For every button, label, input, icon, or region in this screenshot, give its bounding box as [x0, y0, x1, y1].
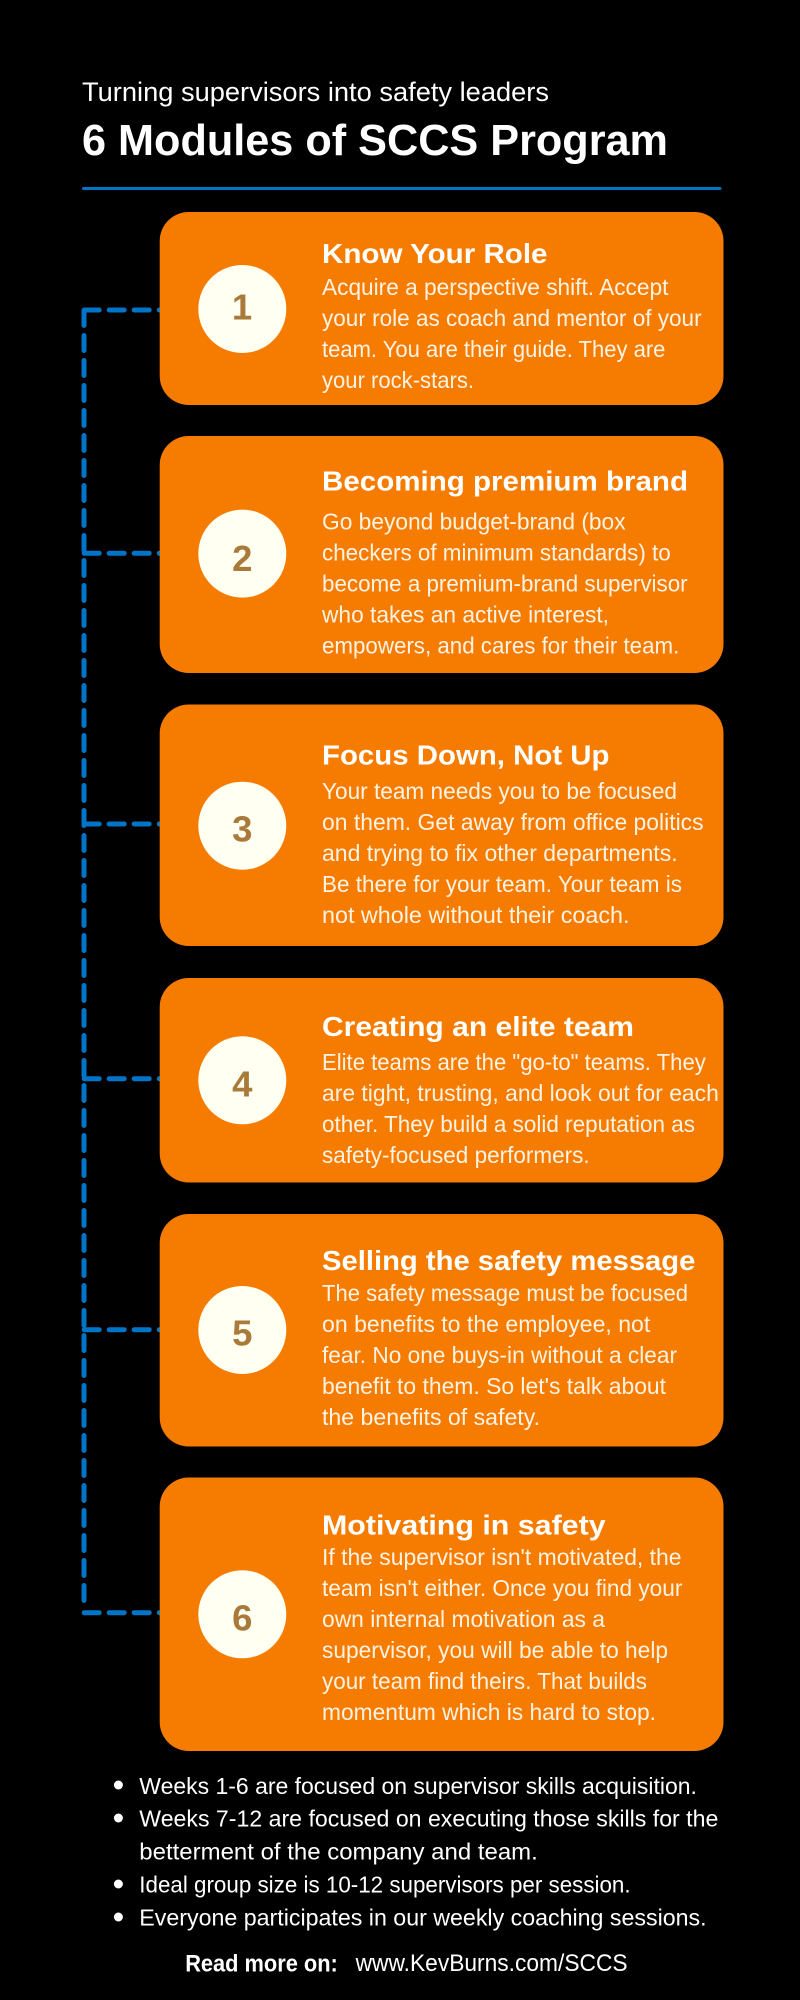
- number badge 2: [198, 510, 286, 598]
- body text: and trying to fix other departments.: [322, 840, 678, 866]
- number badge 5: [198, 1286, 286, 1374]
- body text: your role as coach and mentor of your: [322, 305, 702, 331]
- dashed connector lines: [84, 310, 160, 1613]
- body text: Elite teams are the "go-to" teams. They: [322, 1049, 706, 1075]
- card background: [160, 212, 723, 405]
- body text: supervisor, you will be able to help: [322, 1637, 668, 1663]
- body text: not whole without their coach.: [322, 902, 630, 928]
- body text: [322, 1280, 688, 1430]
- body text: own internal motivation as a: [322, 1606, 605, 1632]
- read more label: Read more on:: [185, 1950, 338, 1978]
- title rule: [82, 187, 722, 190]
- body text: team. You are their guide. They are: [322, 336, 665, 362]
- header: [82, 77, 722, 190]
- body text: empowers, and cares for their team.: [322, 632, 679, 658]
- body text: momentum which is hard to stop.: [322, 1699, 656, 1725]
- body text: [322, 1544, 683, 1725]
- body text: [322, 1049, 719, 1168]
- body text: [322, 274, 702, 393]
- number badge 4: [198, 1036, 286, 1124]
- body text: other. They build a solid reputation as: [322, 1111, 695, 1137]
- card background: [160, 1478, 723, 1751]
- number badge 6: [198, 1570, 286, 1658]
- body text: your rock-stars.: [322, 367, 474, 393]
- subtitle: Turning supervisors into safety leaders: [82, 77, 549, 107]
- number badge 2: 2: [232, 538, 252, 579]
- bullet list: Weeks 7-12 are focused on executing those skills for the: [139, 1806, 718, 1832]
- body text: [321, 508, 688, 658]
- title: 6 Modules of SCCS Program: [82, 116, 668, 165]
- bullet list: Everyone participates in our weekly coaching sessions.: [139, 1905, 707, 1931]
- heading: Motivating in safety: [322, 1510, 606, 1541]
- heading: Creating an elite team: [322, 1011, 634, 1042]
- body text: on benefits to the employee, not: [322, 1311, 651, 1337]
- body text: the benefits of safety.: [322, 1404, 540, 1430]
- heading: Becoming premium brand: [322, 466, 688, 496]
- panel: module 4: [160, 978, 723, 1182]
- number badge 5: 5: [232, 1313, 252, 1354]
- bullet list: betterment of the company and team.: [139, 1838, 538, 1864]
- number badge 1: 1: [232, 286, 252, 327]
- bullet list: Ideal group size is 10-12 supervisors per session.: [139, 1872, 631, 1898]
- body text: on them. Get away from office politics: [322, 809, 704, 835]
- number badge 4: 4: [232, 1064, 253, 1104]
- panel: module 3: [160, 704, 723, 946]
- card background: [160, 704, 723, 946]
- heading: Know Your Role: [322, 238, 548, 269]
- body text: become a premium-brand supervisor: [322, 570, 688, 596]
- body text: Be there for your team. Your team is: [322, 871, 682, 897]
- body text: Acquire a perspective shift. Accept: [322, 274, 669, 300]
- panel: module 2: [160, 436, 723, 673]
- card background: [160, 978, 723, 1182]
- body text: The safety message must be focused: [322, 1280, 688, 1306]
- body text: fear. No one buys-in without a clear: [322, 1342, 677, 1368]
- body text: are tight, trusting, and look out for each: [322, 1080, 719, 1106]
- number badge 3: 3: [232, 808, 252, 849]
- website url: www.KevBurns.com/SCCS: [355, 1950, 628, 1977]
- heading: Focus Down, Not Up: [322, 740, 610, 770]
- body text: benefit to them. So let's talk about: [322, 1373, 667, 1399]
- panel: module 6: [160, 1478, 723, 1751]
- panel: module 5: [160, 1214, 723, 1446]
- bullet list: [114, 1773, 718, 1931]
- read more footer: [185, 1950, 628, 1978]
- number badge 6: 6: [232, 1598, 252, 1638]
- body text: team isn't either. Once you find your: [322, 1575, 683, 1601]
- bullet list: Weeks 1-6 are focused on supervisor skills acquisition.: [139, 1773, 697, 1799]
- body text: [322, 778, 704, 928]
- body text: Go beyond budget-brand (box: [322, 508, 626, 534]
- card background: [160, 436, 723, 673]
- body text: safety-focused performers.: [322, 1142, 590, 1168]
- heading: Selling the safety message: [322, 1245, 695, 1276]
- body text: If the supervisor isn't motivated, the: [322, 1544, 682, 1570]
- body text: who takes an active interest,: [321, 602, 609, 628]
- panel: module 1: [160, 212, 723, 405]
- body text: your team find theirs. That builds: [322, 1668, 647, 1694]
- number badge 1: [198, 265, 286, 353]
- body text: Your team needs you to be focused: [322, 778, 677, 804]
- number badge 3: [198, 782, 286, 870]
- card background: [160, 1214, 723, 1446]
- body text: checkers of minimum standards) to: [322, 540, 671, 566]
